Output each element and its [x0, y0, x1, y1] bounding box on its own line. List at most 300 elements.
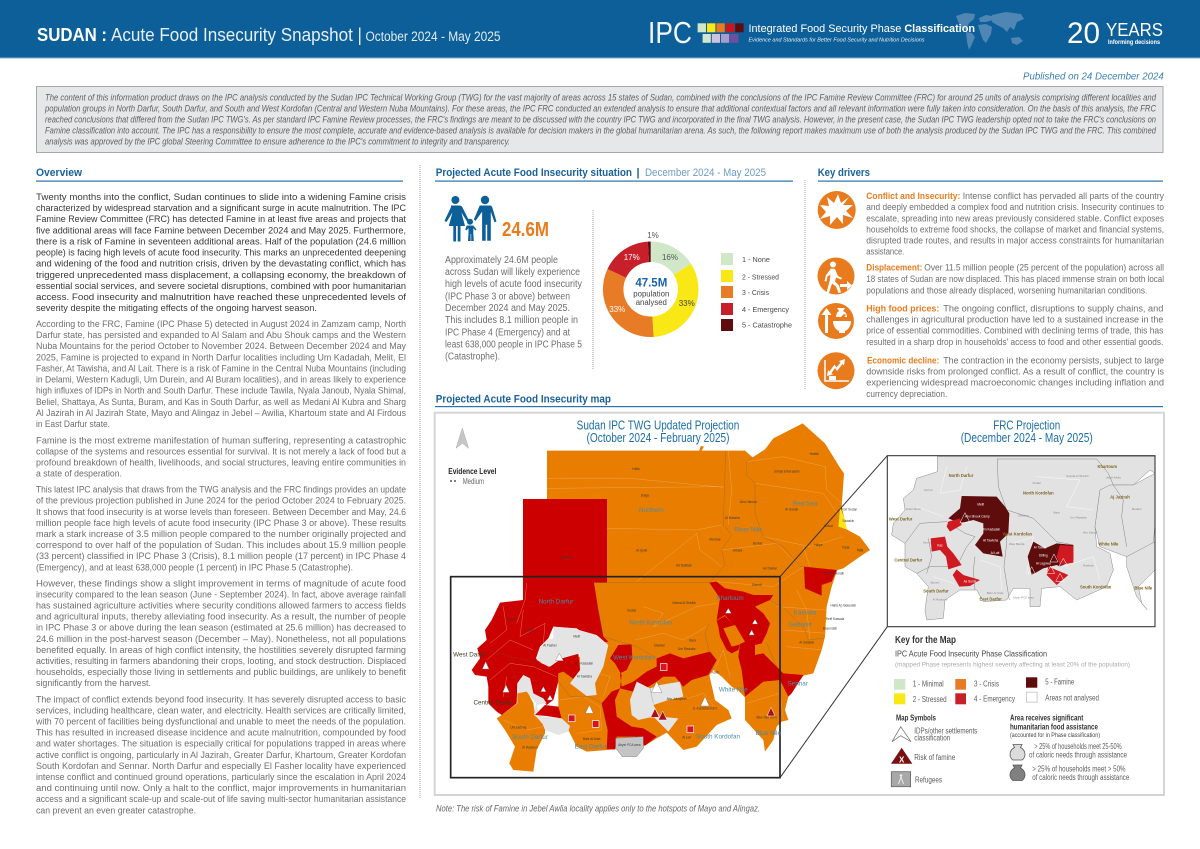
- locality labels: Um Rawaba: [678, 647, 696, 651]
- locality labels: Al Galabat: [799, 640, 814, 644]
- state labels: [453, 500, 818, 751]
- heading: projected situation: December 2024 - May 2025: [645, 167, 766, 179]
- state labels: North Kordofan: [629, 619, 673, 626]
- paragraph: conflict impact: active conflict is ongoing, particularly in Al Jazirah, Greater Darfur, Khartoum, Greater Kordofan: [36, 750, 406, 761]
- icon: high food prices: [818, 303, 854, 339]
- 20 years badge: 20: [1067, 17, 1100, 50]
- state labels: Kassala: [794, 609, 817, 616]
- locality labels: At Tawisha: [577, 675, 592, 679]
- map: TWG projection of Sudan: [451, 423, 870, 778]
- inset labels: Kernoi: [924, 488, 933, 492]
- locality labels: S. Kordofan IDPs: [693, 706, 718, 710]
- locality labels: Sheikan: [654, 644, 665, 648]
- paragraph: lead: and widening of the food and nutrition crisis, driven by the devastating conflict, which has: [36, 259, 406, 270]
- locality labels: Gebrat Al Sheikh: [672, 601, 696, 605]
- paragraph: conflict impact: and water shortages. The situation is especially critical for populations trapped in areas where: [36, 739, 406, 750]
- paragraph: lean season comparison: and agricultural inputs, thereby alleviating food insecurity. As a result, the number of people: [36, 612, 406, 623]
- inset labels: Abu Zabad: [1083, 530, 1098, 534]
- locality labels: Atbara: [733, 549, 743, 553]
- legend: donut phases: 5 - Catastrophe: [742, 320, 792, 330]
- paragraph: lead: people) is facing high levels of acute food insecurity. This marks an unprecedented deepening: [36, 248, 406, 259]
- paragraph: conflict impact: South Kordofan and Sennar. North Darfur and especially El Fasher locality have experienced: [36, 761, 406, 772]
- driver: economic decline: Economic decline:: [867, 355, 939, 366]
- subheading: phase classification: IPC Acute Food Insecurity Phase Classification: [895, 648, 1047, 658]
- 20 years badge: YEARS: [1106, 19, 1163, 40]
- state labels: West Kordofan: [613, 654, 655, 661]
- panel: map frame: [435, 413, 1164, 795]
- white famine labels: Melit: [977, 503, 984, 507]
- state labels: White Nile: [719, 686, 748, 693]
- legend: phase swatches: 3 - Crisis: [974, 680, 999, 689]
- white famine labels: Abu Shouk Camp: [965, 515, 990, 519]
- state labels: River Nile: [734, 527, 762, 534]
- legend: humanitarian food assistance: Area receives significant: [1010, 714, 1084, 722]
- state labels: Red Sea: [793, 500, 818, 507]
- legend: humanitarian food assistance: > 25% of households meet 25-50%: [1034, 742, 1122, 751]
- paragraph: conflict impact: services, including healthcare, clean water, and electricity. Health services are critically limited,: [36, 705, 406, 716]
- state labels: Sennar: [787, 681, 808, 688]
- boundaries: [905, 459, 1127, 600]
- paragraph: lean season comparison: significantly from the harvest.: [36, 678, 151, 689]
- legend: donut phases: [721, 253, 792, 331]
- paragraph: FRC famine findings: Al Jazirah in Al Jazirah State, Mayo and Alingaz in Jebel – Awilia, Khartoum state and Al Firdous: [36, 408, 406, 419]
- inset labels: West Kordofan: [1003, 531, 1033, 536]
- donut chart: population by phase: analysed: [636, 298, 667, 307]
- paragraph: conflict impact: This has resulted in increased disease incidence and acute malnutrition, compounded by food: [36, 728, 406, 739]
- region: Khartoum and Al Jazirah phase 4: [709, 582, 803, 697]
- state labels: South Kordofan: [696, 733, 740, 740]
- legend: evidence level: Evidence Level: [448, 466, 496, 476]
- paragraph: conflict impact: with 70 percent of facilities being dysfunctional and unable to meet the needs of the population.: [35, 716, 406, 728]
- region: Darfur phase 4: [472, 499, 608, 715]
- paragraph: lean season comparison: [36, 578, 406, 689]
- title: October 2024 - May 2025: [366, 29, 500, 44]
- inset labels: Buram: [931, 580, 940, 584]
- world map graphic: [956, 12, 1024, 50]
- paragraph: famine definition: profound breakdown of health, livelihoods, and social structures, leaving entire communities in: [36, 458, 406, 468]
- paragraph: FRC famine findings: Nuba Mountains for the period October to November 2024. Between December 2024 and May: [36, 341, 406, 352]
- markers: refugees: [568, 664, 694, 733]
- paragraph: famine definition: [36, 435, 407, 480]
- header banner: [0, 0, 1200, 58]
- heading: projected situation: Projected Acute Food Insecurity situation: [436, 167, 632, 179]
- region: Nuba famine: [1028, 542, 1073, 575]
- locality labels: Sinkat: [824, 524, 833, 528]
- driver: economic decline: The contraction in the economy persists, subject to large: [943, 355, 1164, 366]
- icon: economic decline: [818, 352, 854, 389]
- driver: high food prices: High food prices:: [866, 304, 939, 315]
- title: Acute Food Insecurity Snapshot |: [111, 24, 362, 45]
- inset labels: White Nile: [1098, 541, 1119, 546]
- heading: TWG projection: [577, 418, 739, 445]
- IPC logo: IPC: [648, 15, 692, 50]
- locality labels: Merowe: [709, 537, 721, 541]
- white famine labels: Al Lait: [991, 551, 1000, 555]
- locality labels: Kutum: [525, 629, 534, 633]
- inset connector lines: [780, 456, 887, 778]
- legend: phase swatches: 1 - Minimal: [913, 680, 944, 689]
- driver: conflict and insecurity: disrupted trade routes, and results in major access constraints for humanitarian: [866, 236, 1164, 247]
- icon: displacement walker: [818, 258, 854, 294]
- driver: high food prices: challenges in agricultural production have led to a sustained increase in the: [866, 315, 1163, 326]
- legend: donut phases: 1 - None: [742, 255, 770, 264]
- paragraph: famine definition: collapse of the systems and resources essential for survival. It is not merely a lack of food but a: [36, 446, 407, 457]
- locality labels: Shendi: [752, 583, 762, 587]
- state labels: North Darfur: [539, 598, 573, 605]
- text block: situation summary: (Catastrophe).: [445, 352, 500, 363]
- legend: evidence level: [448, 466, 496, 486]
- inset labels: Rashad: [1083, 564, 1094, 568]
- paragraph: famine definition: a state of desperation.: [36, 469, 122, 480]
- legend: map symbols: [891, 714, 977, 787]
- donut chart: population by phase: 1%: [647, 231, 659, 240]
- locality labels: Abu Hamad: [740, 500, 757, 504]
- locality labels: Barbar: [753, 542, 762, 546]
- heading: FRC projection: FRC Projection: [993, 418, 1060, 432]
- locality labels: Halfa Aj Jadeedah: [831, 604, 856, 608]
- locality labels: Al Leri: [682, 735, 691, 739]
- paragraph: FRC famine findings: Darfur state, has persisted and expanded to Al Salam and Abu Shouk camps and the Western: [36, 330, 406, 341]
- legend: humanitarian food assistance: (accounted for in Phase classification): [1010, 732, 1100, 739]
- locality labels: Agig: [857, 548, 863, 552]
- inset labels: Aj Jazirah: [1110, 495, 1130, 500]
- subheading: phase classification: (mapped Phase represents highest severity affecting at least 20% of the population): [895, 662, 1130, 668]
- IPC name: [748, 23, 975, 44]
- paragraph: lean season comparison: in IPC Phase 3 or above during the lean season (estimated at 25.6 million) has decreased to: [36, 623, 406, 634]
- markers: risk of famine: [651, 707, 775, 720]
- locality labels: [507, 452, 863, 749]
- locality labels: Al Radoum: [522, 745, 538, 749]
- inset labels: West Darfur: [889, 516, 913, 521]
- legend: humanitarian food assistance: of caloric needs through assistance: [1032, 773, 1130, 782]
- text block: situation summary: across Sudan will likely experience: [445, 267, 580, 278]
- intro note box: analysis was approved by the IPC global Steering Committee to ensure adherence to the IPC's commitment to integrity and transparency.: [45, 137, 510, 147]
- region: South Darfur phase 3: [497, 690, 545, 772]
- text block: situation summary: (IPC Phase 3 or above) between: [445, 292, 570, 302]
- region: North Darfur not analysed: [537, 627, 608, 696]
- locality labels: Kernoi: [507, 618, 517, 622]
- locality labels: Port Sudan: [841, 508, 857, 512]
- icon: north arrow: [456, 428, 469, 448]
- paragraph: FRC famine findings: [36, 319, 406, 430]
- map: FRC projection inset: [887, 456, 1155, 627]
- heading: TWG projection: Sudan IPC TWG Updated Projection: [577, 418, 739, 432]
- locality labels: Al Fasher: [543, 644, 557, 648]
- inset labels: Sodari: [1032, 481, 1041, 485]
- driver: displacement: Over 11.5 million people (25 percent of the population) across all: [924, 263, 1164, 274]
- paragraph: latest analysis: (Emergency), and at least 638,000 people (1 percent) in IPC Phase 5 (Catastrophe).: [36, 562, 353, 573]
- locality labels: Dalgo: [641, 494, 649, 498]
- paragraph: FRC famine findings: According to the FRC, Famine (IPC Phase 5) detected in August 2024 in Zamzam camp, North: [36, 319, 406, 330]
- inset labels: Abyei PCA area: [1013, 595, 1034, 599]
- locality labels: Al Qolid: [636, 549, 647, 553]
- heading: food insecurity map: Projected Acute Food Insecurity map: [436, 394, 611, 406]
- paragraph: FRC famine findings: high influxes of IDPs in North and South Darfur. These include Tawila, Nyala Janoub, Nyala Shimal,: [36, 386, 406, 397]
- state labels: Central Darfur: [473, 699, 513, 706]
- driver: conflict and insecurity: assistance.: [866, 247, 904, 258]
- markers: IDP settlements: [482, 608, 758, 713]
- paragraph: lead: access. Food insecurity and malnutrition have reached these unprecedented levels of: [36, 292, 406, 303]
- text block: situation summary: December 2024 and May 2025.: [445, 303, 570, 314]
- locality labels: Um Dafoug: [510, 725, 527, 729]
- locality labels: Sawakin: [842, 519, 855, 523]
- legend: map symbols: classification: [914, 734, 950, 743]
- legend: map symbols: Map Symbols: [896, 714, 937, 722]
- region: North Darfur famine: [948, 496, 1009, 557]
- locality labels: Halfa: [632, 467, 640, 471]
- inset labels: Um Rawaba: [1070, 515, 1087, 519]
- inset labels: Bara: [1054, 510, 1060, 514]
- paragraph: conflict impact: The impact of conflict extends beyond food insecurity. It has severely disrupted access to basic: [36, 694, 406, 705]
- legend: map symbols: X: [899, 756, 905, 764]
- inset labels: Jebel Moon: [906, 507, 921, 511]
- stat: 24.6M: 24.6M: [502, 219, 549, 241]
- donut chart: population by phase: [609, 231, 695, 327]
- paragraph: conflict impact: intense conflict and continued ground operations, particularly since the escalation in April 2024: [36, 772, 407, 783]
- locality labels: Hamashkoraib: [824, 571, 844, 575]
- locality labels: Jubayt Elma'aadin: [774, 470, 800, 474]
- heading: overview: Overview: [36, 167, 82, 179]
- locality labels: Melit: [573, 635, 580, 639]
- inset labels: Al Radoum: [933, 598, 948, 602]
- locality labels: Kosti: [711, 670, 719, 674]
- paragraph: lean season comparison: 24.6 million in the post-harvest season (December – May). Nonetheless, not all populations: [36, 634, 406, 645]
- driver: displacement: Displacement:: [866, 263, 922, 274]
- white famine labels: Dilling: [1039, 554, 1048, 558]
- locality labels: Abu Jubayhah: [667, 697, 687, 701]
- region: Nuba Mountains not analysed: [630, 682, 683, 732]
- inset labels: Medani: [1132, 507, 1142, 511]
- text block: situation summary: least 638,000 people in IPC Phase 5: [445, 340, 582, 351]
- locality labels: Blue Nile IDPs: [756, 715, 777, 719]
- heading: FRC projection: (December 2024 - May 2025): [961, 431, 1093, 445]
- donut chart: population by phase: 47.5M: [635, 277, 667, 289]
- paragraph: FRC famine findings: in Delami, Western Kadugli, Um Durein, and Al Buram localities), and in areas likely to experience: [36, 375, 406, 386]
- inset labels: [889, 464, 1153, 602]
- region: Kordofan phase 4: [602, 644, 717, 749]
- text block: situation summary: [445, 255, 582, 363]
- intro note box: [36, 86, 1163, 152]
- paragraph: lean season comparison: households, especially those living in settlements and public buildings, are unlikely to benefit: [36, 667, 406, 678]
- locality labels: Haiya: [814, 543, 823, 547]
- legend: map symbols: IDPs/other settlements: [914, 726, 977, 735]
- legend: humanitarian food assistance: humanitarian food assistance: [1010, 722, 1099, 732]
- inset labels: Central Darfur: [894, 557, 923, 562]
- paragraph: lean season comparison: insecurity compared to the lean season (June - September 2024). In fact, above average rainfall: [36, 589, 406, 600]
- icon: family: [445, 196, 496, 242]
- paragraph: latest analysis: of the previous projection published in June 2024 for the period October 2024 to February 2025.: [36, 496, 406, 507]
- text block: situation summary: IPC Phase 4 (Emergency) and at: [445, 328, 570, 338]
- legend: map symbols: Risk of famine: [914, 753, 956, 762]
- inset labels: Jebel Awlia: [1106, 475, 1121, 479]
- title: SUDAN :: [37, 24, 107, 45]
- donut chart: population by phase: 33%: [609, 305, 625, 314]
- text block: situation summary: This includes 8.1 million people in: [445, 315, 578, 326]
- state boundaries: [488, 451, 823, 730]
- driver: economic decline: [866, 355, 1164, 400]
- locality labels: Bara: [689, 639, 696, 643]
- state labels: South Darfur: [512, 734, 548, 741]
- driver: high food prices: The ongoing conflict, disruptions to supply chains, and: [943, 304, 1163, 315]
- driver: conflict and insecurity: and deeply embedded a complex food and nutrition crisis. Insecurity continues to: [866, 202, 1164, 213]
- map note: Note: The risk of Famine in Jebel Awlia locality applies only to the hotspots of Mayo and Alingaz.: [436, 803, 760, 813]
- paragraph: FRC famine findings: in East Darfur state.: [36, 419, 110, 430]
- legend: map symbols: Refugees: [915, 775, 942, 784]
- paragraph: conflict impact: and continuing until now. Only a halt to the conflict, major improvements in humanitarian: [36, 783, 406, 794]
- legend: donut phases: 2 - Stressed: [742, 272, 779, 282]
- publication date: Published on 24 December 2024: [1023, 70, 1164, 82]
- paragraph: lead: there is a risk of Famine in seventeen additional areas. Half of the population (24.6 million: [36, 236, 406, 247]
- IPC name: Integrated Food Security Phase Classification: [748, 23, 975, 35]
- paragraph: lead: Twenty months into the conflict, Sudan continues to slide into a widening Famine crisis: [36, 192, 406, 203]
- locality labels: Tokar: [842, 545, 850, 549]
- state labels: West Darfur: [453, 651, 487, 658]
- legend: donut phases: 3 - Crisis: [742, 288, 769, 297]
- driver: conflict and insecurity: [866, 191, 1164, 258]
- inset locator frame: [451, 577, 780, 778]
- paragraph: lean season comparison: activities, resulting in farmers abandoning their crops, looting, and stock destruction. Displaced: [36, 656, 406, 667]
- driver: high food prices: price of essential commodities. Combined with declining terms of trade, this has: [866, 326, 1163, 337]
- state labels: East Darfur: [575, 744, 607, 751]
- inset labels: East Darfur: [979, 597, 1002, 602]
- driver: economic decline: currency depreciation.: [866, 389, 947, 400]
- paragraph: latest analysis: [36, 485, 407, 573]
- legend: phase swatches: 2 - Stressed: [913, 695, 947, 704]
- text block: overview: [35, 192, 407, 816]
- paragraph: famine definition: Famine is the most extreme manifestation of human suffering, representing a catastrophic: [36, 435, 406, 446]
- legend: humanitarian food assistance: > 25% of households meet > 50%: [1032, 765, 1126, 774]
- 20 years badge: Informing decisions: [1108, 40, 1161, 46]
- state labels: Blue Nile: [756, 730, 781, 737]
- paragraph: conflict impact: access and a significant scale-up and scale-out of life saving multi-sector humanitarian assistance: [36, 794, 406, 805]
- driver: high food prices: [866, 304, 1163, 348]
- inset labels: North Kordofan: [1023, 491, 1054, 496]
- region: South Darfur not analysed: [517, 675, 570, 735]
- region: risk of famine: [931, 518, 1073, 587]
- paragraph: latest analysis: million people face high levels of acute food insecurity (IPC Phase 3 or above). These results: [36, 518, 406, 529]
- legend: phase swatches: 4 - Emergency: [974, 694, 1015, 704]
- donut chart: population by phase: 33%: [679, 299, 695, 308]
- driver: economic decline: downside risks from prolonged conflict. As a result of conflict, the country is: [866, 366, 1164, 377]
- paragraph: lead: triggered unprecedented mass displacement, a collapsing economy, the breakdown of: [36, 270, 406, 281]
- legend: phase swatches: 5 - Famine: [1045, 678, 1075, 687]
- legend: humanitarian food assistance: of caloric needs through assistance: [1029, 751, 1127, 760]
- paragraph: lead: five additional areas will face Famine between December 2024 and May 2025. Furthermore,: [36, 225, 406, 236]
- inset labels: North Darfur: [949, 473, 974, 478]
- legend: phase swatches: Areas not analysed: [1045, 693, 1099, 702]
- locality boundaries: [487, 451, 843, 733]
- locality labels: Reifi Kassala: [826, 617, 844, 621]
- paragraph: latest analysis: It shows that food insecurity is at worse levels than foreseen. Between December and May, 24.6: [36, 507, 406, 518]
- legend: donut phases: 4 - Emergency: [742, 305, 789, 314]
- subheading: phase classification: [895, 648, 1130, 668]
- region: Kassala phase 4: [804, 567, 837, 596]
- paragraph: lead: essential social services, and severe societal disruptions, combined with poor humanitarian: [36, 281, 406, 292]
- paragraph: lean season comparison: benefited equally. In areas of high conflict intensity, the hostilities severely disrupted farming: [36, 645, 406, 656]
- driver: conflict and insecurity: Conflict and Insecurity:: [866, 191, 960, 202]
- paragraph: lead: [36, 192, 406, 314]
- paragraph: lead: severity despite the mitigating effects of the ongoing harvest season.: [36, 303, 317, 314]
- panel: key for the map: [891, 635, 1130, 787]
- state labels: Khartoum: [716, 595, 744, 602]
- paragraph: latest analysis: correspond to over half of the population of Sudan. This includes about 15.9 million people: [36, 540, 406, 551]
- heading: map key: Key for the Map: [895, 635, 956, 646]
- heading: projected situation: [435, 167, 793, 182]
- driver: displacement: populations and those already displaced, worsening humanitarian conditions.: [866, 285, 1147, 296]
- locality labels: Halaib: [810, 452, 819, 456]
- state labels: Northern: [639, 507, 664, 514]
- paragraph: conflict impact: can prevent an even greater catastrophe.: [36, 805, 196, 816]
- locality labels: Ad Damar: [763, 567, 777, 571]
- white famine labels: Um Kadadah: [982, 528, 1000, 532]
- white famine labels: [937, 503, 1051, 584]
- locality labels: Sodari: [627, 608, 637, 612]
- donut chart: population by phase: 17%: [624, 253, 640, 262]
- markers: IDP triangles: [960, 513, 1068, 581]
- inset labels: Blue Nile: [1134, 586, 1153, 591]
- paragraph: FRC famine findings: Beliel, Shattaya, As Sunta, Buram, and Kas in South Darfur, as well as Medani Al Kubra and Sharg: [36, 397, 406, 408]
- inset labels: South Darfur: [923, 588, 949, 593]
- inset labels: Khartoum: [1098, 464, 1117, 469]
- text block: situation summary: high levels of acute food insecurity: [445, 279, 582, 290]
- inset labels: Sheikan: [1018, 514, 1029, 518]
- paragraph: latest analysis: (33 percent) classified in IPC Phase 3 (Crisis), 8.1 million people (17 percent) in IPC Phase 4: [36, 551, 407, 562]
- region: base not classified: [892, 457, 1155, 620]
- donut chart: population by phase: population: [633, 289, 669, 298]
- heading: key drivers: Key drivers: [818, 167, 870, 179]
- white famine labels: Kas: [937, 544, 943, 548]
- legend: evidence level: Medium: [463, 477, 484, 486]
- paragraph: conflict impact: [35, 694, 407, 816]
- heading: TWG projection: (October 2024 - February 2025): [586, 431, 730, 445]
- heading: FRC projection: [961, 418, 1093, 445]
- paragraph: latest analysis: mark a stark increase of 3.5 million people compared to the number originally projected and: [36, 529, 406, 540]
- locality labels: Ad Dabbah: [676, 564, 692, 568]
- locality labels: Al Ganab: [785, 508, 798, 512]
- IPC name: Evidence and Standards for Better Food Security and Nutrition Decisions: [748, 38, 925, 44]
- heading: projected situation: |: [636, 167, 640, 179]
- locality labels: Abyei PCA area: [618, 743, 641, 747]
- donut chart: population by phase: 16%: [662, 253, 678, 262]
- IPC logo: [648, 15, 744, 50]
- paragraph: latest analysis: This latest IPC analysis that draws from the TWG analysis and the FRC findings provides an update: [36, 485, 406, 496]
- paragraph: lean season comparison: However, these findings show a slight improvement in terms of magnitude of acute food: [36, 578, 406, 589]
- white famine labels: As Sunta: [964, 580, 977, 584]
- paragraph: FRC famine findings: Fasher, At Tawisha, and Al Lait. There is a risk of Famine in the Central Nuba Mountains (including: [36, 363, 406, 374]
- driver: economic decline: experiencing widespread macroeconomic changes including inflation and: [866, 378, 1164, 389]
- inset labels: Azum: [923, 540, 931, 544]
- title: [37, 24, 500, 45]
- state labels: Gedaref: [789, 622, 812, 629]
- driver: displacement: [866, 263, 1164, 296]
- locality labels: Basundah: [823, 626, 837, 630]
- inset labels: South Kordofan: [1080, 585, 1112, 590]
- locality labels: Al Malha: [560, 556, 572, 560]
- 20 years badge: [1067, 17, 1163, 50]
- locality labels: Bahr Al Arab: [583, 737, 601, 741]
- white famine labels: At Tawisha: [983, 539, 999, 543]
- white famine labels: Al Lagowa: [1036, 561, 1051, 565]
- locality labels: Um Kadadah: [575, 661, 593, 665]
- inset labels: Bahr Al Arab: [987, 591, 1004, 595]
- locality labels: Al Buhaira: [725, 516, 740, 520]
- legend: phase swatches: [894, 677, 1099, 704]
- text block: situation summary: Approximately 24.6M people: [445, 255, 558, 266]
- legend: humanitarian food assistance: [1010, 714, 1130, 782]
- paragraph: FRC famine findings: 2025, Famine is projected to expand in North Darfur localities including Um Kadadah, Melit, El: [36, 352, 406, 363]
- region: phase 3 country base: [547, 423, 870, 752]
- driver: conflict and insecurity: Intense conflict has pervaded all parts of the country: [963, 191, 1164, 202]
